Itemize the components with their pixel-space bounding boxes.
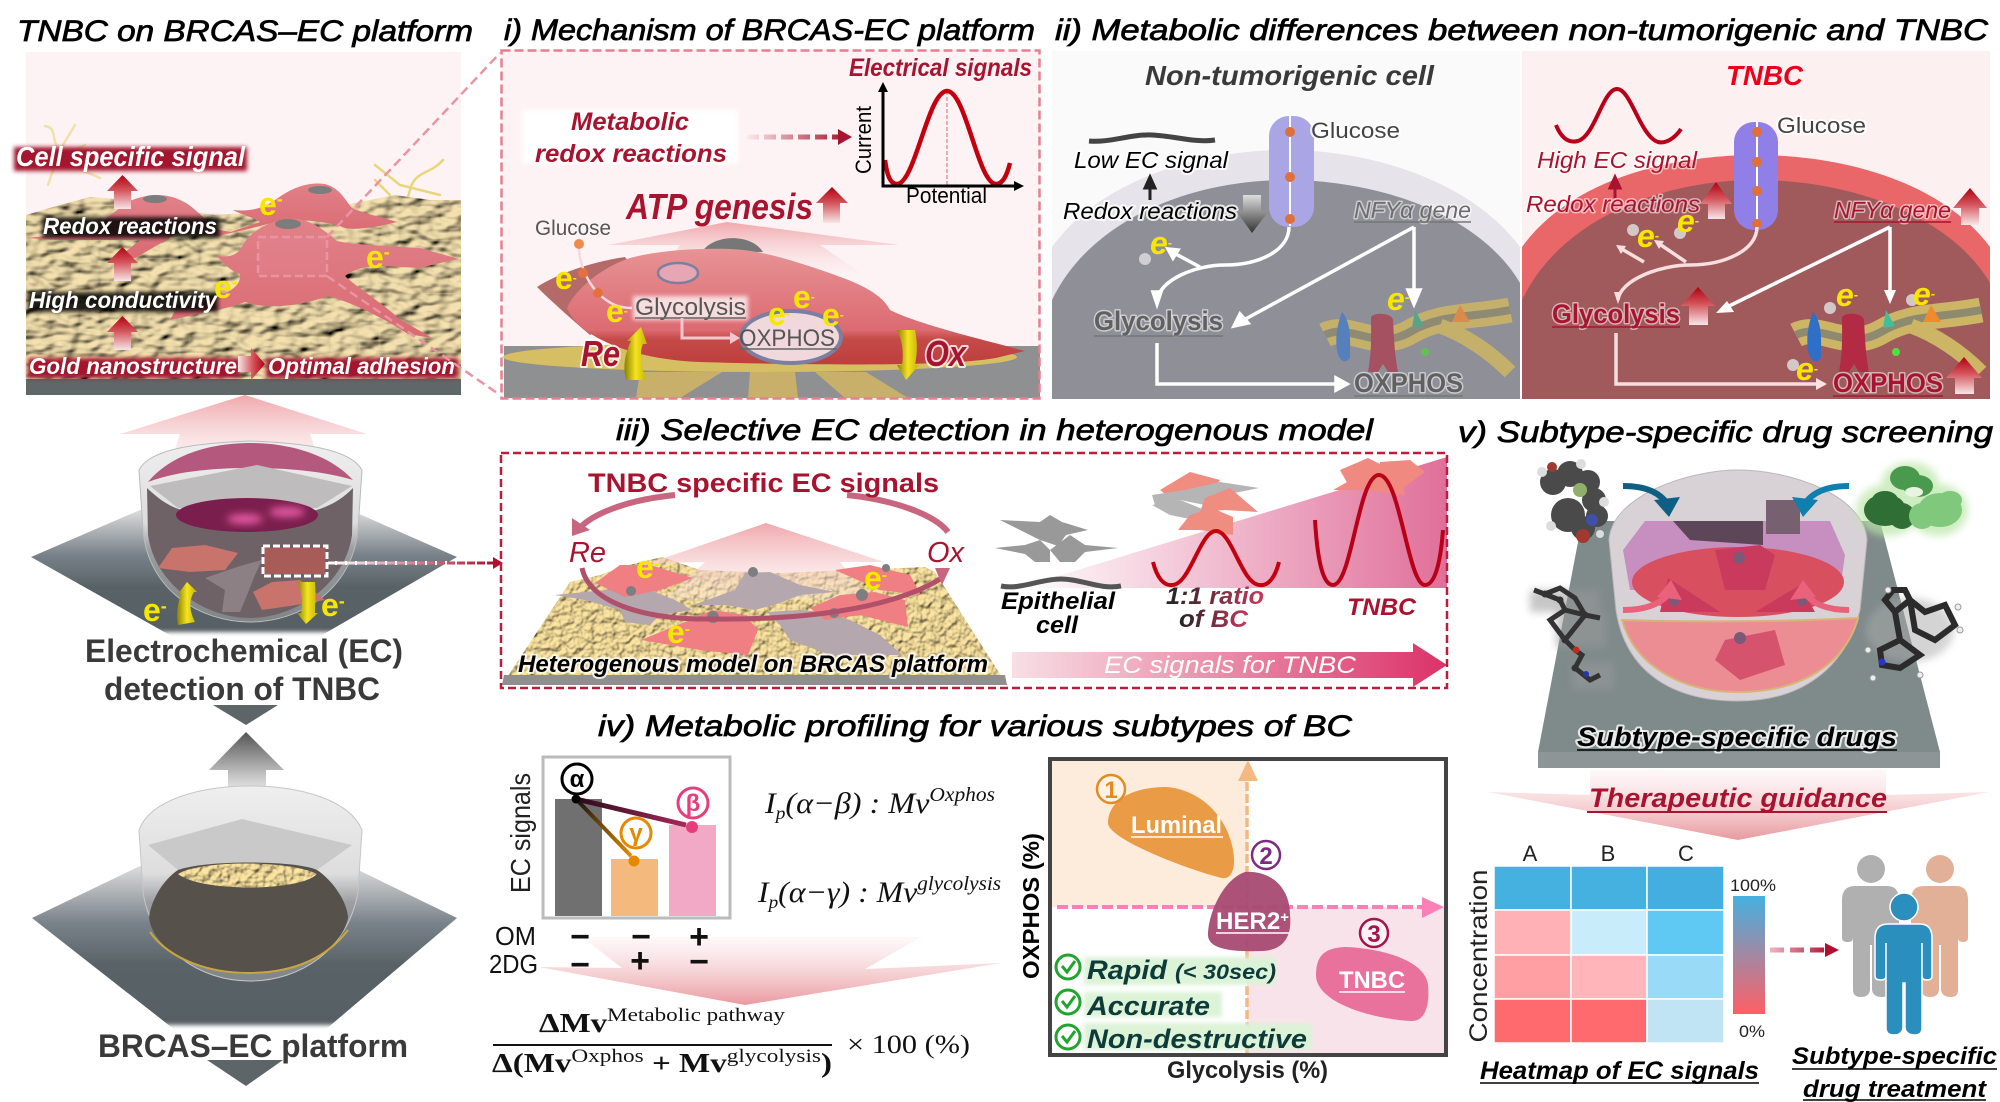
treatment table: 2DG: [489, 949, 538, 979]
arrow head: [730, 332, 740, 344]
cells: [1660, 545, 1815, 680]
equation: metabolic fraction: ΔMv: [539, 1008, 595, 1038]
electrons: -: [654, 556, 659, 573]
electrons: e: [864, 560, 882, 596]
molecule: ball-and-stick right: [1865, 587, 1963, 681]
equation: glycolysis velocity: p: [766, 892, 778, 912]
label: HER2+: HER2: [1216, 908, 1280, 935]
title: TNBC on BRCAS-EC platform: TNBC on BRCAS–EC platform: [17, 15, 473, 48]
equation: OXPHOS velocity: p: [774, 803, 785, 823]
dish interior: [147, 488, 353, 618]
electrons: -: [882, 567, 887, 584]
feature labels: (< 30sec): [1175, 961, 1276, 984]
arrow: big pink chevron: [539, 937, 1001, 1005]
equation: metabolic fraction: glycolysis: [727, 1046, 821, 1067]
arrow: dark blue left: [1623, 486, 1680, 517]
treatment table: −: [570, 946, 590, 984]
chart: EC signal bars: [505, 757, 730, 918]
heading: Electrical signals: [849, 54, 1032, 82]
arrow: pink chevron up to nanostructure: [120, 395, 367, 470]
electron: -: [1168, 235, 1172, 250]
heatmap legend: [1730, 876, 1776, 1041]
arrow: small up: [1610, 177, 1620, 198]
electron label: e: [214, 269, 232, 305]
arrow: upward stack: [107, 175, 138, 350]
tray tip: [213, 705, 278, 725]
cell body: [567, 249, 1025, 364]
electron labels: -: [786, 307, 790, 321]
label: Luminal: Luminal: [1131, 812, 1222, 839]
equation: metabolic fraction: × 100 (%): [847, 1030, 970, 1059]
y label: OXPHOS (%): [1018, 833, 1044, 979]
dome highlights: [227, 507, 305, 524]
redox arcs: [578, 495, 948, 619]
equation: OXPHOS velocity: (α−β) : Mv: [785, 787, 930, 820]
outer cell membrane: [1052, 150, 1520, 399]
label: redox reactions: Redox reactions: [1063, 198, 1238, 224]
arrow: dashed to patients: [1770, 943, 1839, 957]
TNBC signal: [1315, 475, 1443, 585]
glucose transporter: [1734, 122, 1778, 230]
feature labels: Accurate: [1086, 991, 1210, 1021]
electron label: e: [259, 186, 277, 222]
molecule: space-filling drug: [1537, 459, 1609, 543]
white callout: metabolic redox reactions: [522, 108, 738, 168]
label: OXPHOS: OXPHOS: [1354, 368, 1463, 398]
title: mechanism: i) Mechanism of BRCAS-EC platform: [504, 14, 1035, 47]
label: glycolysis: Glycolysis: [635, 294, 746, 321]
cytoplasm: [1522, 180, 1990, 399]
glass dish: [139, 786, 362, 981]
device: EC detection dish: [31, 441, 503, 638]
icon: yellow nanofibers: [45, 125, 443, 240]
title: selective detection: iii) Selective EC detection in heterogenous model: [616, 414, 1375, 447]
gold rim: [150, 930, 348, 973]
grey cells in dish: [205, 560, 262, 612]
electron labels: e: [768, 296, 786, 332]
electrons on membrane: e: [1796, 351, 1814, 387]
treatment table: +: [689, 918, 709, 956]
label: optimal adhesion: Optimal adhesion: [268, 353, 455, 379]
chart: OXPHOS vs glycolysis quadrant: [1018, 759, 1446, 1084]
arrow: yellow down: [897, 330, 919, 380]
electron labels: -: [573, 271, 577, 285]
x label: Potential: [906, 183, 987, 208]
electrons: e: [1677, 203, 1695, 239]
horizontal dashed arrow: [1057, 897, 1444, 918]
electron label: e: [143, 592, 161, 628]
electrode plate: [504, 346, 1040, 398]
icon: patient group: [1842, 855, 1968, 1035]
axis heads: [878, 82, 888, 92]
x label: Glycolysis (%): [1167, 1057, 1328, 1084]
label: electrochemical detection: detection of TNBC: [104, 671, 380, 707]
title: Non-tumorigenic cell: [1145, 60, 1435, 91]
y label: EC signals: [505, 773, 536, 893]
label: NFY-alpha gene: NFYα gene: [1834, 197, 1951, 223]
signal curve: [885, 91, 1010, 184]
1:1 signal: [1153, 531, 1279, 585]
plot frame: [1050, 759, 1446, 1055]
arrow: dashed to signal: [747, 129, 852, 145]
equation: glycolysis velocity: glycolysis: [917, 873, 1001, 895]
electron label: -: [384, 242, 390, 262]
label: Ox: Ox: [927, 537, 965, 569]
treatment table: [489, 918, 709, 984]
electron: e: [1150, 225, 1168, 261]
label: electrochemical detection: Electrochemical (EC): [85, 633, 403, 669]
tray tip: [207, 1060, 283, 1086]
label: gold nanostructure: Gold nanostructure: [29, 353, 237, 379]
treatment table: −: [631, 918, 651, 956]
shaded wall: [1766, 500, 1800, 534]
grey cells: [555, 572, 902, 655]
label: redox reactions: Redox reactions: [1526, 191, 1701, 217]
label: epithelial cell: cell: [1036, 612, 1079, 639]
electrons: e: [667, 614, 685, 650]
platform: [502, 557, 1007, 685]
equation: metabolic fraction: ): [821, 1048, 832, 1078]
electron labels: e: [606, 293, 624, 329]
marker 2: [1252, 841, 1280, 870]
label: glucose: Glucose: [1311, 118, 1400, 143]
platform base: [502, 675, 1007, 685]
callout line to selective detection panel: [328, 557, 503, 569]
high EC signal curve: [1556, 89, 1681, 142]
feature glow: [1084, 957, 1312, 1050]
heatmap column labels: [1523, 841, 1694, 866]
molecule: ball-and-stick left: [1530, 588, 1614, 690]
title: metabolic differences: ii) Metabolic differences between non-tumorigenic and TNBC: [1055, 14, 1988, 47]
equation: glycolysis velocity: (α−γ) : Mv: [778, 876, 918, 909]
label: high EC signal: High EC signal: [1537, 147, 1698, 173]
gamma marker: γ: [629, 820, 643, 847]
label: epithelial cell: Epithelial: [1001, 588, 1116, 615]
magenta dome: [176, 498, 318, 532]
pathway arrows: [1153, 227, 1420, 390]
electron labels: -: [811, 290, 815, 304]
shaded wall: [1673, 521, 1763, 545]
chart: electrical signals: [849, 54, 1032, 208]
treatment table: +: [630, 942, 650, 980]
gold disc: [503, 342, 1017, 372]
pink cells in dish: [158, 545, 325, 610]
label: Re: Re: [581, 333, 620, 374]
tray: [1538, 521, 1940, 752]
vertical dashed arrow: [1238, 760, 1258, 1055]
electron labels: e: [822, 297, 840, 333]
panel: mechanism of platform: [501, 50, 1040, 399]
label: redox reactions: Redox reactions: [43, 213, 217, 239]
electron labels: [555, 260, 844, 333]
membrane with proteins: [1796, 305, 1981, 372]
label: glycolysis: Glycolysis: [1094, 306, 1223, 336]
y label: Current: [851, 106, 876, 174]
orange quadrant: [1051, 760, 1247, 907]
electrons on membrane: -: [1931, 286, 1935, 301]
glucose transporter: [1269, 116, 1314, 227]
label: low EC signal: Low EC signal: [1074, 147, 1229, 173]
label: heterogenous model: Heterogenous model on BRCAS platform: [518, 651, 988, 678]
electron label: -: [161, 596, 167, 616]
label: subtype-specific drugs: Subtype-specific drugs: [1577, 722, 1897, 752]
arrow: guidance chevron: [1488, 770, 1989, 840]
beta marker: [678, 788, 708, 818]
TNBC cell cluster: [1333, 458, 1425, 495]
electron label: e: [321, 587, 339, 623]
equation: OXPHOS velocity: I: [765, 787, 775, 820]
marker 1: [1097, 775, 1125, 804]
electron labels: e: [555, 260, 573, 296]
panel: selective detection: [501, 453, 1447, 688]
dark floor: [149, 862, 348, 974]
label: NFY-alpha gene: NFYα gene: [1354, 197, 1471, 223]
electron labels: -: [840, 308, 844, 322]
pink quadrant: [1247, 907, 1446, 1055]
pathway arrows: [1614, 227, 1896, 390]
heatmap column labels: C: [1678, 841, 1694, 866]
equation: metabolic fraction: Metabolic pathway: [607, 1005, 786, 1026]
label: glycolysis: Glycolysis: [1552, 299, 1680, 329]
arrow: pink left: [1623, 580, 1682, 610]
arrow: grey down: [1237, 195, 1268, 233]
small mitochondrion: [658, 263, 698, 283]
dashed frame: [502, 50, 1040, 398]
arrow: redox up: [1700, 182, 1732, 219]
label: glucose: Glucose: [1777, 113, 1866, 138]
gold nanostructure surface: [26, 195, 461, 380]
marker 3: [1360, 919, 1388, 948]
electron: e: [1387, 281, 1405, 317]
equation: metabolic fraction: Δ(Mv: [492, 1048, 557, 1078]
gamma marker: [621, 818, 651, 848]
electrons: e: [1637, 218, 1655, 254]
equation: OXPHOS velocity: Oxphos: [929, 784, 995, 806]
nuclei: [626, 564, 890, 623]
cell: front: [170, 219, 459, 338]
electron label: e: [366, 239, 384, 275]
label: epithelial cell: [1001, 588, 1116, 639]
yellow current arrows: [297, 582, 318, 624]
electrode traces: [636, 372, 908, 398]
arrow: grey upward: [209, 732, 284, 812]
electron labels: e: [793, 279, 811, 315]
big arrow: EC signals: EC signals for TNBC: [1104, 652, 1357, 679]
electrode base: [26, 379, 461, 395]
blob: HER2: [1208, 872, 1290, 951]
checklist: [1056, 955, 1080, 1049]
large mitochondrion: [741, 311, 841, 363]
electrons on membrane: e: [1836, 277, 1854, 313]
electron label: -: [277, 189, 283, 209]
label: Re: Re: [569, 537, 606, 569]
alpha marker: [562, 764, 592, 794]
electrons: e: [636, 549, 654, 585]
label: subtype-specific drug treatment: Subtype-specific: [1792, 1043, 1997, 1070]
label: electrochemical detection: [70, 632, 420, 707]
white callout: metabolic redox reactions: Metabolic: [571, 108, 689, 136]
label: subtype-specific drug treatment: [1792, 1043, 1997, 1102]
panel: non-tumorigenic cell: [1052, 51, 1520, 399]
dashed frame: [501, 453, 1447, 688]
electrons: -: [1655, 228, 1659, 243]
gold layer: [178, 864, 317, 888]
glass dish: [1609, 470, 1867, 701]
arrow: yellow up: [624, 327, 647, 380]
electron: [1139, 225, 1172, 265]
treatment table: OM: [495, 921, 536, 951]
electrons on membrane: -: [1854, 287, 1858, 302]
label: glucose: Glucose: [535, 217, 611, 240]
electrons: [1627, 203, 1699, 254]
tray: [32, 866, 457, 1030]
feature labels: [1086, 955, 1307, 1054]
label: ratio of BC: of BC: [1179, 606, 1249, 633]
white callout: metabolic redox reactions: redox reactions: [535, 140, 727, 168]
feature labels: Non-destructive: [1087, 1024, 1307, 1054]
label: TNBC: TNBC: [1347, 594, 1417, 621]
arrow to beta: [576, 799, 686, 825]
label: OXPHOS: OXPHOS: [1833, 368, 1943, 398]
low EC signal curve: [1089, 135, 1215, 141]
label: OXPHOS: OXPHOS: [739, 325, 835, 352]
electrons: -: [685, 621, 690, 638]
outer cell membrane: [1522, 155, 1990, 399]
electron label: -: [232, 272, 238, 292]
glass dish: [139, 441, 362, 622]
electron: -: [1405, 289, 1410, 305]
blob: TNBC: [1316, 947, 1428, 1021]
red floor: [1632, 547, 1844, 617]
heatmap column labels: A: [1523, 841, 1538, 866]
lower reflection: [1622, 618, 1858, 692]
data dots: [572, 794, 698, 866]
grey epithelial cells: [995, 515, 1118, 562]
label: high conductivity: High conductivity: [29, 287, 218, 313]
label: Ox: Ox: [925, 333, 968, 374]
arrow: glycolysis up: [1681, 287, 1715, 325]
alpha marker: α: [570, 766, 585, 793]
electron label: -: [339, 591, 345, 611]
heatmap column labels: B: [1601, 841, 1615, 866]
mixed cell cluster: [1152, 472, 1259, 535]
arrow: NFY up: [1953, 188, 1987, 225]
treatment table: −: [570, 918, 590, 956]
inspection box: [263, 546, 327, 576]
equation: metabolic fraction: Oxphos: [571, 1046, 644, 1067]
big arrow: EC signals: [1012, 643, 1447, 687]
blob: Luminal: [1108, 787, 1234, 878]
feature labels: Rapid: [1087, 955, 1168, 985]
title: metabolic profiling: iv) Metabolic profiling for various subtypes of BC: [598, 710, 1352, 743]
marker 2: 2: [1259, 843, 1273, 870]
yellow current arrows: [177, 582, 197, 625]
label: cell specific signal: Cell specific signal: [16, 141, 246, 172]
title: TNBC: [1726, 60, 1804, 91]
label: ATP genesis: ATP genesis: [625, 186, 813, 227]
label: ratio of BC: [1166, 583, 1264, 633]
panel: TNBC cell: [1522, 51, 1990, 399]
wedge: [1019, 457, 1447, 588]
electrons on membrane: -: [1814, 361, 1818, 376]
pink arrow: [650, 523, 884, 600]
medium top: [148, 443, 353, 482]
molecule: antibody protein: [1856, 462, 1968, 536]
electrons: [636, 549, 887, 650]
axes: [883, 88, 1016, 186]
epithelial signal: [1001, 579, 1121, 587]
title: drug screening: v) Subtype-specific drug screening: [1458, 416, 1993, 449]
nuclei: [1669, 552, 1807, 644]
heatmap: [1494, 866, 1724, 1043]
heatmap legend: 100%: [1730, 876, 1776, 895]
equation: glycolysis velocity: I: [758, 876, 768, 909]
equation: metabolic fraction: + Mv: [644, 1048, 727, 1078]
heatmap y label: Concentration: [1465, 870, 1493, 1042]
membrane with proteins: [1325, 305, 1510, 372]
tray: [31, 510, 457, 638]
marker 1: 1: [1104, 777, 1118, 804]
arrow to gamma: [576, 799, 631, 856]
arrow: glycolysis to OXPHOS: [682, 318, 735, 338]
arrow: black up: [1145, 177, 1155, 200]
marker 3: 3: [1367, 921, 1381, 948]
peak guide: [946, 91, 948, 185]
reflected wall: [150, 465, 352, 508]
glucose chain: [574, 239, 632, 308]
label: TNBC: TNBC: [1339, 967, 1405, 994]
cytoplasm: [1052, 180, 1520, 399]
arrow: OXPHOS up: [1946, 357, 1982, 394]
tray edge: [1538, 752, 1940, 768]
arrow: pink right: [1790, 580, 1849, 610]
inspection box: [258, 237, 327, 276]
nucleus: [702, 238, 763, 252]
reflected wall: [148, 819, 352, 870]
back wall: [1623, 521, 1845, 590]
label: TNBC specific signals: TNBC specific EC signals: [588, 468, 939, 498]
electrons on membrane: e: [1913, 276, 1931, 312]
heatmap legend: 0%: [1739, 1022, 1765, 1041]
label: BRCAS-EC platform: BRCAS–EC platform: [98, 1028, 408, 1064]
arrow: blue right: [1792, 486, 1849, 517]
electron labels: -: [624, 304, 628, 318]
pink cells: [595, 565, 921, 655]
cell back lobe: [537, 257, 660, 335]
equation: metabolic fraction: [492, 1005, 970, 1078]
drug screening device: [1538, 470, 1940, 768]
cell: rear right: [222, 184, 397, 235]
arrow: ATP up: [816, 187, 848, 223]
beta marker: β: [686, 790, 700, 817]
label: heatmap of EC signals: Heatmap of EC signals: [1480, 1057, 1759, 1085]
electrons: -: [1695, 213, 1699, 228]
zoom lines to mechanism panel: [327, 53, 500, 395]
label: HER2+: +: [1280, 909, 1289, 926]
cell: rear left: [26, 195, 232, 258]
device: BRCAS-EC dish: [32, 786, 457, 1030]
arc arrowheads: [572, 518, 950, 585]
arrow: to optimal adhesion: [238, 348, 265, 380]
panel: nanostructure with TNBC cells: [14, 52, 461, 395]
treatment table: −: [689, 943, 709, 981]
electrons on membrane: [1787, 276, 1935, 387]
axis heads: [1014, 181, 1024, 191]
pink chevron: [608, 222, 899, 272]
label: therapeutic guidance: Therapeutic guidance: [1589, 783, 1887, 813]
label: ratio of BC: 1:1 ratio: [1166, 583, 1264, 610]
